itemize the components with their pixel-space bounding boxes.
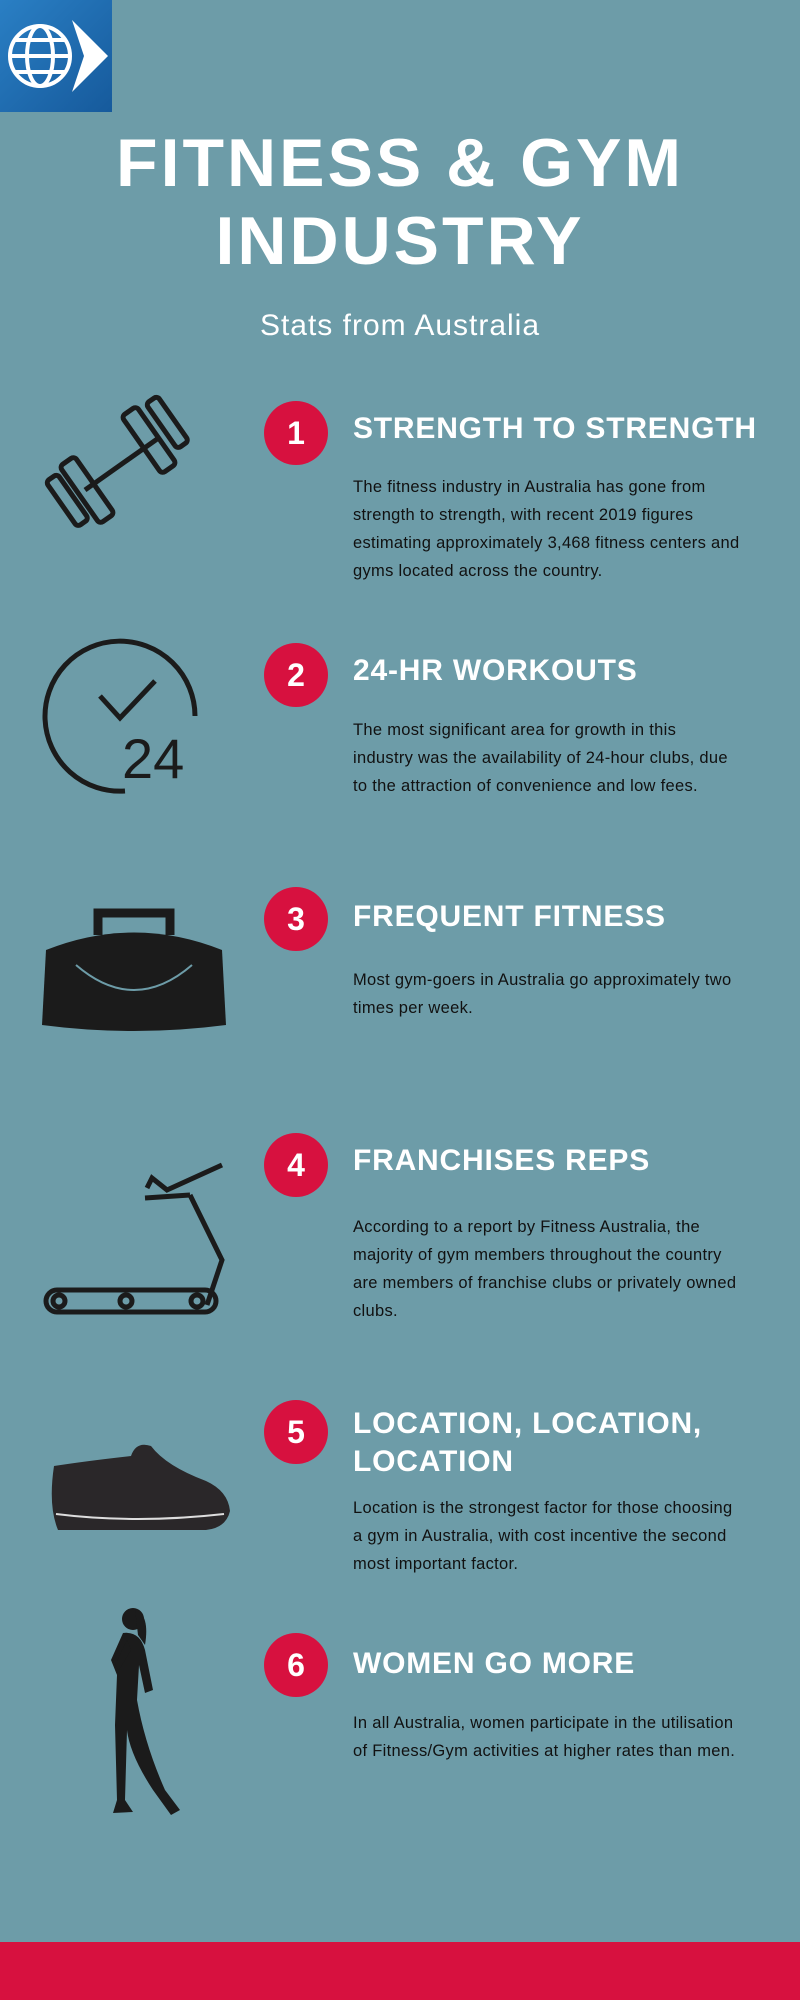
icon: treadmill	[44, 1162, 225, 1314]
icon: dumbbell	[44, 394, 190, 528]
text 4: clubs.	[353, 1302, 398, 1320]
icon: woman walking	[111, 1608, 180, 1815]
text 4: According to a report by Fitness Australia, the	[353, 1218, 700, 1236]
text 3	[353, 971, 731, 1017]
number 3	[264, 887, 328, 951]
number 2	[264, 643, 328, 707]
text 6	[353, 1714, 735, 1760]
text 4: are members of franchise clubs or privately owned	[353, 1274, 736, 1292]
text 2: industry was the availability of 24-hour clubs, due	[353, 749, 728, 767]
heading 3: FREQUENT FITNESS	[353, 900, 666, 933]
icon: globe	[10, 26, 70, 86]
heading 5	[353, 1407, 702, 1478]
text 1: gyms located across the country.	[353, 562, 603, 580]
text 5: most important factor.	[353, 1555, 518, 1573]
text 5	[353, 1499, 732, 1573]
text 6: of Fitness/Gym activities at higher rates than men.	[353, 1742, 735, 1760]
number 4: 4	[287, 1147, 305, 1183]
logo	[0, 0, 112, 112]
number 5	[264, 1400, 328, 1464]
heading 1: STRENGTH TO STRENGTH	[353, 412, 757, 445]
number 4	[264, 1133, 328, 1197]
number 5: 5	[287, 1414, 305, 1450]
icon: gym bag	[42, 908, 226, 1031]
icon: clock 24: 24	[122, 727, 184, 790]
icon: arrow	[72, 20, 108, 92]
heading 5: LOCATION	[353, 1445, 514, 1478]
number 6: 6	[287, 1647, 305, 1683]
title: INDUSTRY	[215, 203, 585, 279]
text 1: The fitness industry in Australia has gone from	[353, 478, 706, 496]
number 1: 1	[287, 415, 305, 451]
text 5: Location is the strongest factor for those choosing	[353, 1499, 732, 1517]
icon: clock 24	[42, 638, 198, 794]
text 5: a gym in Australia, with cost incentive the second	[353, 1527, 727, 1545]
heading 2: 24-HR WORKOUTS	[353, 654, 638, 687]
number 6	[264, 1633, 328, 1697]
text 4	[353, 1218, 736, 1320]
title	[116, 125, 684, 279]
text 3: Most gym-goers in Australia go approximately two	[353, 971, 731, 989]
number 3: 3	[287, 901, 305, 937]
heading 5: LOCATION, LOCATION,	[353, 1407, 702, 1440]
footer bar	[0, 1942, 800, 2000]
number 2: 2	[287, 657, 305, 693]
text 2: The most significant area for growth in this	[353, 721, 676, 739]
text 4: majority of gym members throughout the country	[353, 1246, 722, 1264]
title: FITNESS & GYM	[116, 125, 684, 201]
icon: shoe	[52, 1444, 230, 1530]
number 1	[264, 401, 328, 465]
text 6: In all Australia, women participate in the utilisation	[353, 1714, 733, 1732]
subtitle: Stats from Australia	[260, 309, 540, 342]
text 3: times per week.	[353, 999, 473, 1017]
heading 4: FRANCHISES REPS	[353, 1144, 650, 1177]
text 1: estimating approximately 3,468 fitness centers and	[353, 534, 739, 552]
text 1	[353, 478, 739, 580]
text 2: to the attraction of convenience and low fees.	[353, 777, 698, 795]
heading 6: WOMEN GO MORE	[353, 1647, 635, 1680]
text 2	[353, 721, 728, 795]
text 1: strength to strength, with recent 2019 figures	[353, 506, 693, 524]
